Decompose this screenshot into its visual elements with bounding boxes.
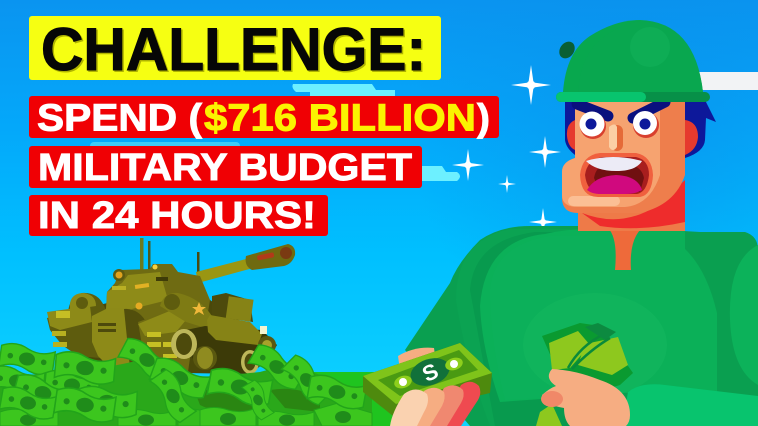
hair <box>565 100 716 158</box>
star <box>192 302 206 315</box>
gun barrel <box>196 258 253 283</box>
rear tracks <box>47 293 112 358</box>
headline line 1: ) <box>477 98 490 140</box>
soldier head <box>556 20 716 231</box>
hand holding bill stack <box>363 343 492 426</box>
turret <box>106 264 210 330</box>
headline line 2: MILITARY BUDGET <box>38 147 412 189</box>
neckline <box>608 228 642 270</box>
icon: bill stack: S <box>418 358 442 387</box>
money pile <box>0 335 372 426</box>
fingers <box>390 382 480 426</box>
right arm edge <box>730 245 758 385</box>
clouds <box>90 84 460 181</box>
wheels <box>171 329 276 374</box>
far shoulder <box>405 226 758 426</box>
tank underlay <box>60 300 275 374</box>
headline line 1 <box>29 96 499 140</box>
front hull <box>186 326 277 374</box>
face <box>562 102 685 213</box>
headline line 1: SPEND ( <box>37 98 202 140</box>
headline line 1: $716 BILLION <box>204 98 476 140</box>
antennas <box>140 238 144 274</box>
bottom row of bills cut by the frame <box>0 409 58 426</box>
mouth <box>580 153 653 197</box>
helmet <box>556 20 710 102</box>
eyes <box>580 111 659 139</box>
loose bills <box>0 342 56 376</box>
title banner: CHALLENGE: <box>42 18 428 84</box>
nose <box>609 124 623 151</box>
title banner: CHALLENGE: <box>41 16 426 83</box>
eyebrows <box>577 102 665 118</box>
sparkles <box>452 65 561 236</box>
ears <box>567 120 575 150</box>
belly glow <box>523 293 667 397</box>
soldier body <box>405 226 758 426</box>
forearm <box>622 384 758 426</box>
hand holding cash <box>536 323 633 426</box>
ground <box>300 372 400 426</box>
highlight on chin <box>568 196 620 206</box>
white stripe behind helmet <box>695 72 758 90</box>
headline line 3: IN 24 HOURS! <box>38 195 316 237</box>
mid track block <box>138 310 194 372</box>
neck <box>578 195 685 231</box>
tank <box>47 238 295 374</box>
center block <box>92 308 140 366</box>
chest <box>480 229 717 402</box>
